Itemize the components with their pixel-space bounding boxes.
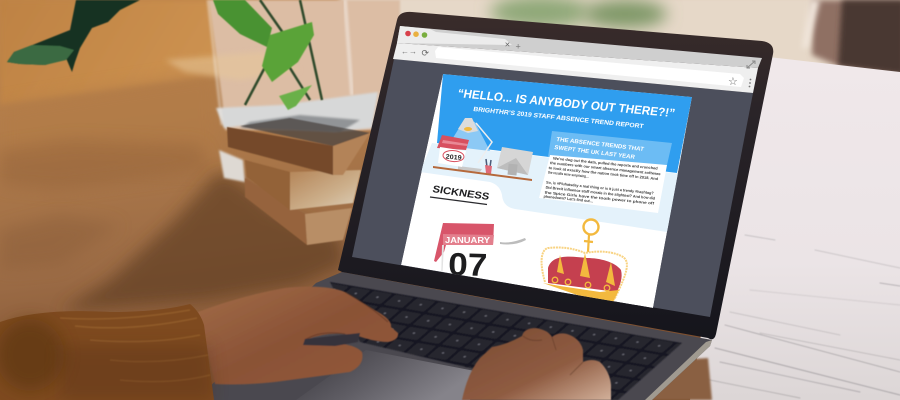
text card heading panel: SWEPT THE UK LAST YEAR [554,145,636,161]
book: bottom [245,178,352,245]
icon: pen pot [485,159,492,174]
icon: expand window [747,61,755,68]
light blue band [420,143,680,232]
icon: desk calendar: 2019 [445,154,462,162]
icon: january calendar: JANUARY [445,236,491,245]
tab strip [397,26,762,68]
title: “HELLO... IS ANYBODY OUT THERE?!” [456,86,676,120]
text card heading panel [548,131,672,165]
heading: sickness: SICKNESS [431,184,491,203]
book: middle [245,160,361,210]
infographic page [401,74,692,308]
icon: lamp base [458,166,482,172]
illustration: desk scene [433,118,533,181]
dark page background [352,59,753,317]
icon: laptop on desk [497,147,533,175]
icon: january calendar [434,223,494,276]
text card body: So, is #Pluhatsday a real thing or is it just a trendy #hashtag? [546,181,654,195]
icon: lamp arm [476,123,492,163]
icon: reload: ⟳ [422,48,430,58]
shelf [433,166,532,181]
icon: bookmark star: ☆ [728,76,738,88]
subtitle: BRIGHTHR’S 2019 STAFF ABSENCE TREND REPORT [473,106,644,130]
icon: back and forward arrows: ←→ [401,47,417,56]
icon: lamp light cone [454,122,490,151]
icon: new tab: + [516,42,521,52]
icon: grey swoosh [500,238,526,244]
text card body: Did Brexit influence staff morale in the slightest? And how did [545,186,656,201]
text card body: the numbers with our smart absence management software [550,161,661,176]
icon: lamp shade [458,118,478,133]
icon: january calendar: 07 [448,246,488,283]
laptop base and keyboard [196,272,712,400]
text card body: the Spice Girls have the tooth power to phone off [544,191,655,206]
stack of three books [227,118,370,245]
trackpad [296,350,480,400]
header: blue background [437,74,692,173]
icon: dark leaf, top left [7,0,140,72]
text card body: We’ve dug out the data, pulled the reports and crunched [553,157,659,171]
icon: green plant in vase [213,0,322,110]
icon: lamp bulb [464,127,472,131]
hand: right [462,328,611,400]
text card heading panel: THE ABSENCE TRENDS THAT [556,137,645,153]
text card body [539,155,667,213]
browser window chrome [352,26,762,317]
text card body: the results were surprising… [548,171,589,179]
white wooden table, right side [650,56,900,400]
toolbar [393,43,758,93]
address bar [435,47,744,87]
icon: menu dots [749,79,751,87]
laptop lid [338,12,773,339]
book: top [227,118,370,175]
icon: close tab: ✕ [504,42,510,49]
glass vase with water [165,0,400,182]
window control dots [405,31,427,38]
text card body: phonedown? Let’s find out… [543,195,594,204]
keyboard [330,282,682,400]
text card body: to look at exactly how the nation took time off in 2018. And [548,166,659,181]
blurred room background, top right [340,0,900,105]
icon: gold crown [542,220,627,302]
sweater sleeve [0,304,214,400]
hand: left [198,287,398,384]
active tab [397,26,512,45]
